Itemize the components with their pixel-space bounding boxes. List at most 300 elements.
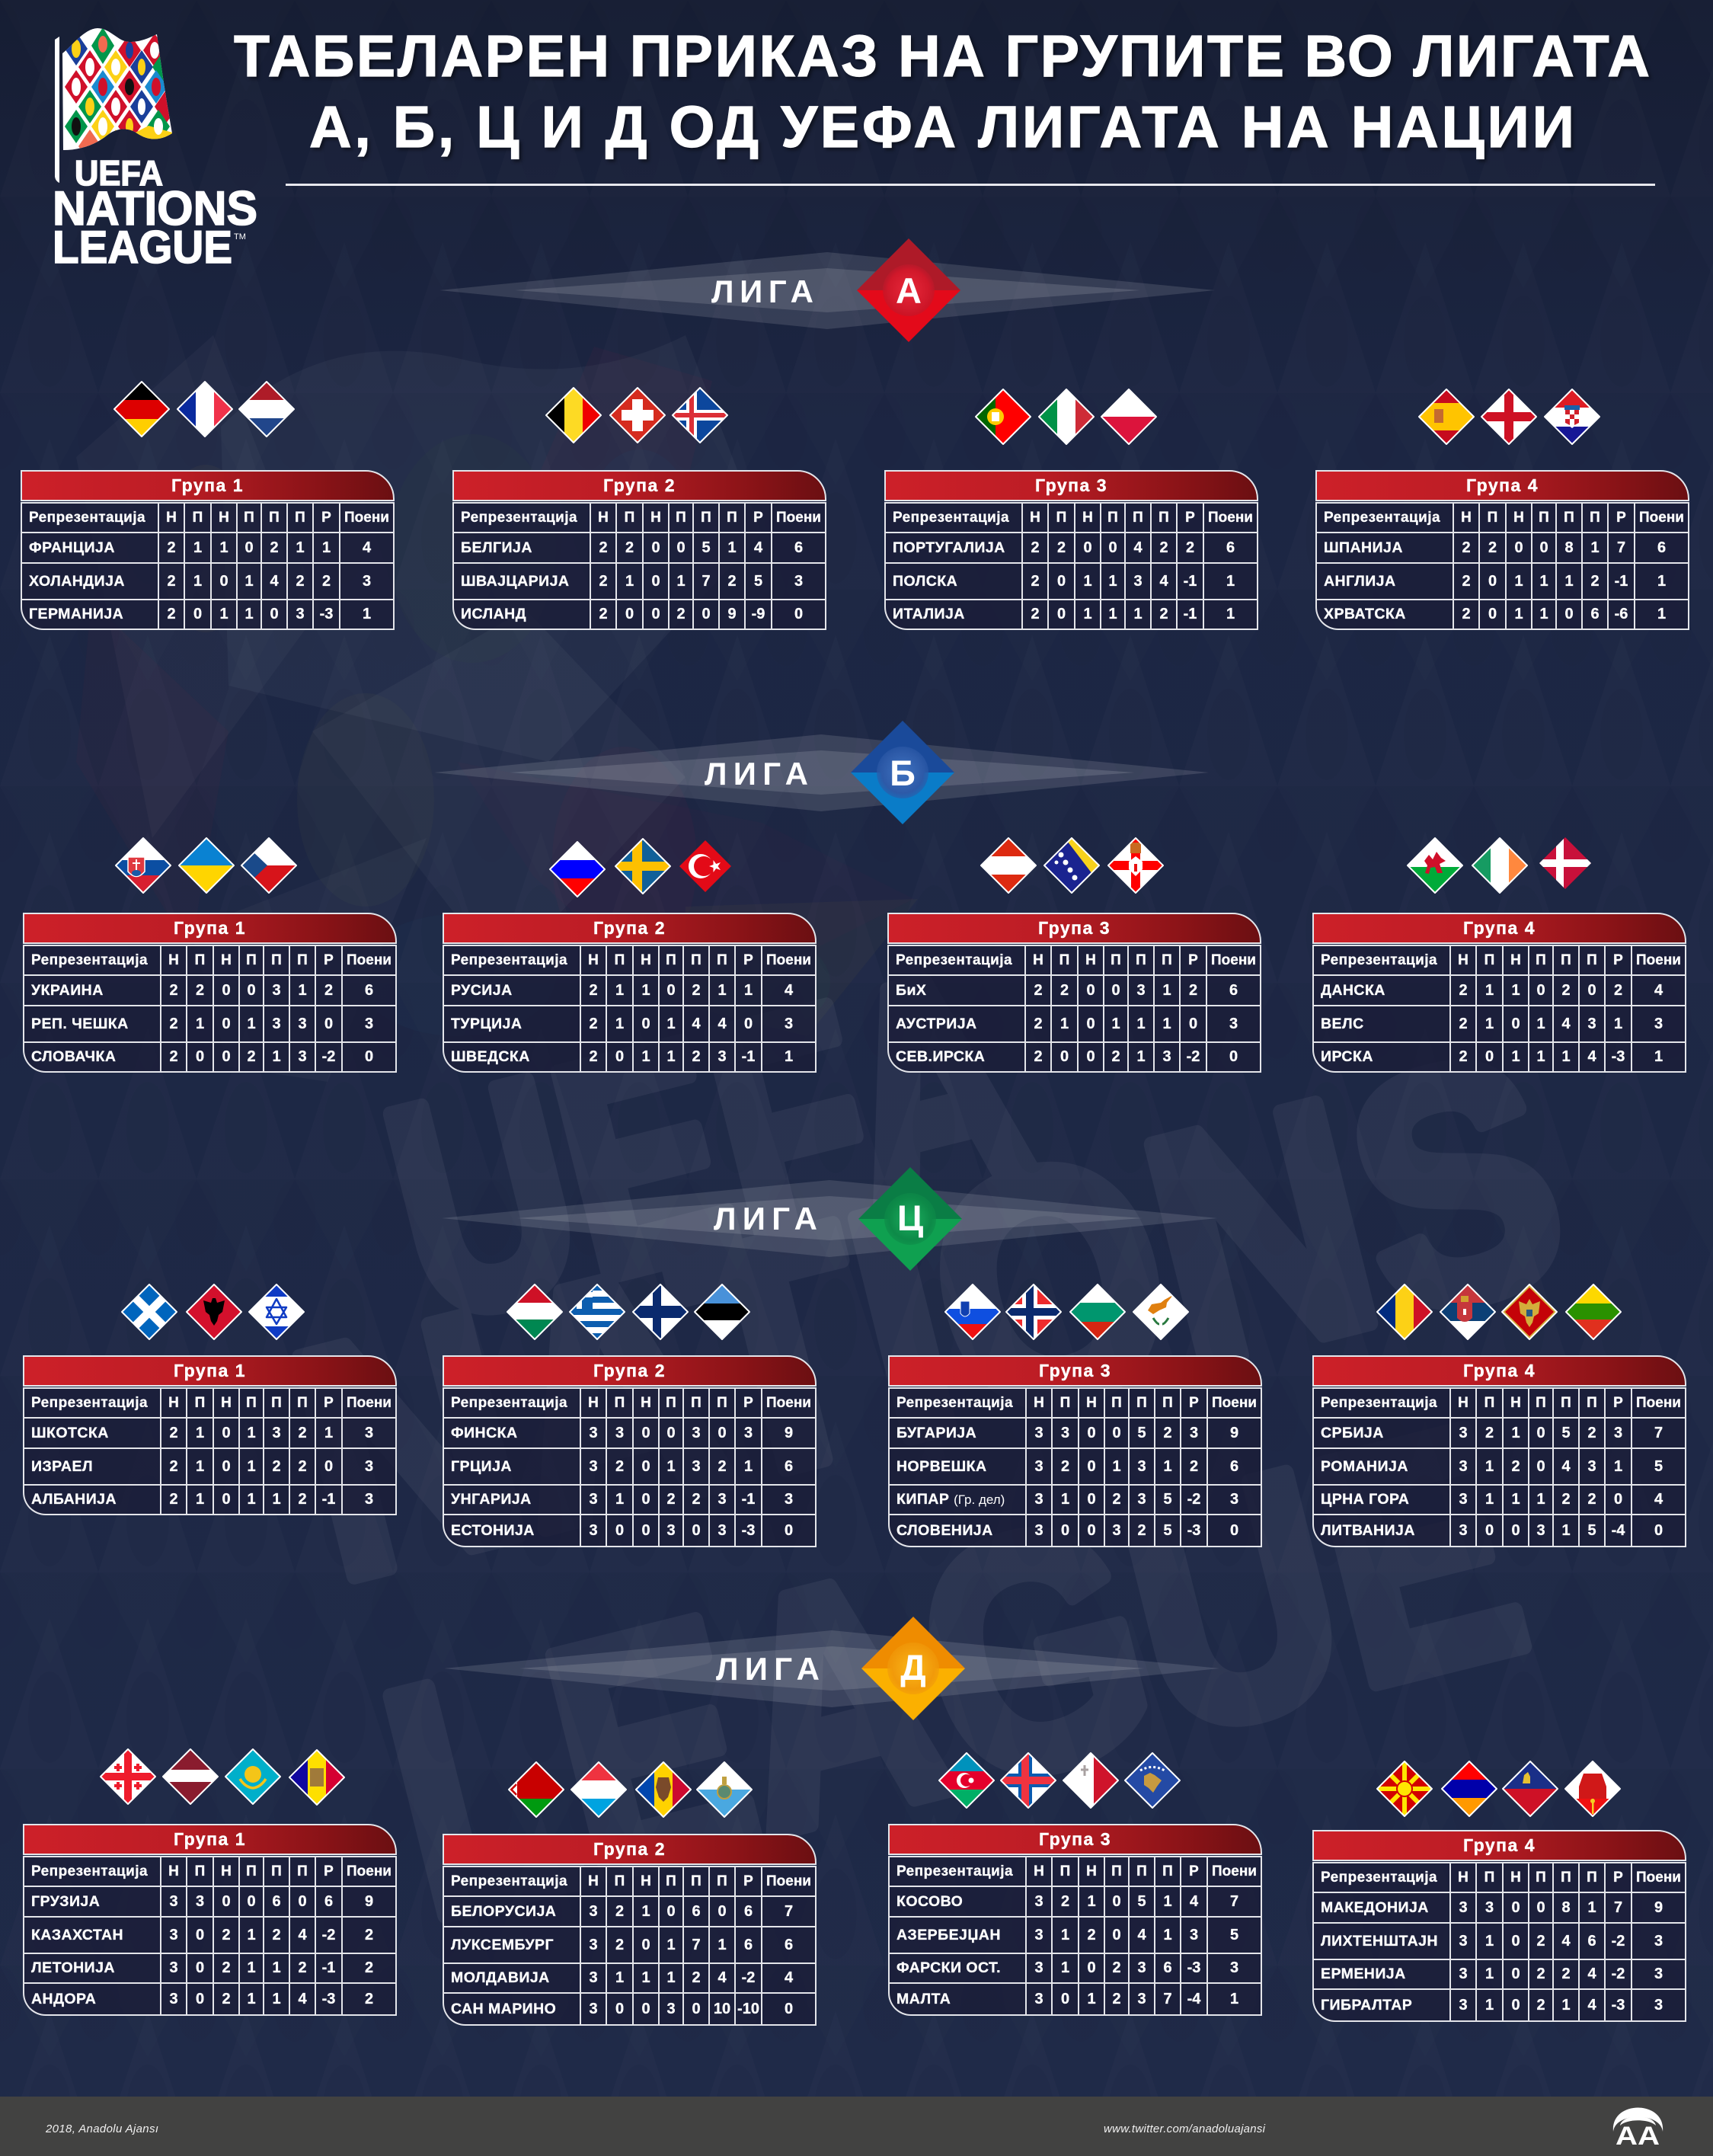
flags: league А — [111, 379, 1603, 447]
standings: 3 — [666, 1522, 676, 1539]
table: league А group 4 — [1315, 470, 1689, 630]
standings: 1 — [1561, 1522, 1571, 1539]
standings: 1 — [1060, 1015, 1069, 1032]
standings: 0 — [1087, 1522, 1096, 1539]
standings: 0 — [196, 1048, 204, 1065]
standings: 2 — [1137, 1522, 1146, 1539]
standings: Репрезентација — [31, 952, 148, 968]
standings: 3 — [1536, 1522, 1545, 1539]
flag: Liechtenstein — [1500, 1758, 1561, 1819]
standings: 2 — [1462, 606, 1471, 622]
standings: 1 — [193, 539, 202, 556]
standings: 3 — [692, 1425, 701, 1441]
standings: Н — [221, 1394, 232, 1411]
flag: Luxembourg — [568, 1759, 629, 1820]
standings: 3 — [1614, 1425, 1622, 1441]
standings: 0 — [1112, 1926, 1121, 1943]
title — [234, 24, 1650, 160]
standings: 0 — [1111, 981, 1120, 998]
standings: -1 — [742, 1491, 755, 1508]
standings: П — [701, 509, 711, 526]
league banner: А: ЛИГА — [711, 273, 813, 309]
league banner: Ц — [442, 1167, 1217, 1271]
standings: Р — [324, 952, 334, 968]
standings: 1 — [717, 981, 727, 998]
standings: П — [1536, 952, 1546, 968]
standings: 3 — [1137, 1990, 1146, 2007]
standings: РУСИЈА — [451, 981, 513, 998]
standings: -3 — [1612, 1048, 1625, 1065]
standings: 5 — [754, 573, 762, 590]
standings: 2 — [222, 1959, 231, 1976]
standings: -4 — [1612, 1522, 1625, 1539]
standings: АЗЕРБЕЈЏАН — [896, 1926, 1001, 1943]
standings: 2 — [272, 1458, 281, 1475]
standings: 4 — [692, 1015, 701, 1032]
logo text — [53, 153, 257, 273]
standings: 0 — [1488, 573, 1497, 590]
standings: П — [1484, 1394, 1494, 1411]
standings: 0 — [365, 1048, 373, 1065]
standings: 1 — [615, 1491, 624, 1508]
standings: П — [1056, 509, 1066, 526]
standings: 2 — [1159, 606, 1168, 622]
standings: 4 — [1587, 1966, 1596, 1982]
flag: Croatia — [1544, 389, 1600, 445]
standings: 1 — [244, 606, 254, 622]
standings: ФРАНЦИЈА — [29, 539, 115, 556]
standings: 1 — [1133, 606, 1143, 622]
standings: 6 — [1229, 981, 1238, 998]
standings: 3 — [1137, 1491, 1146, 1508]
standings: П — [297, 952, 308, 968]
standings: Н — [1086, 1394, 1097, 1411]
standings: 3 — [1061, 1425, 1069, 1441]
standings: МАКЕДОНИЈА — [1321, 1898, 1429, 1915]
standings: 1 — [744, 981, 753, 998]
standings: 0 — [324, 1458, 333, 1475]
standings: 1 — [666, 1015, 676, 1032]
standings: 0 — [641, 1425, 650, 1441]
logo trademark: TM — [234, 232, 246, 242]
standings: 3 — [794, 573, 803, 590]
standings: 1 — [1061, 1926, 1069, 1943]
standings: -3 — [320, 606, 333, 622]
standings: 0 — [651, 573, 660, 590]
standings: АНДОРА — [31, 1990, 96, 2007]
standings: 2 — [1031, 573, 1040, 590]
standings: П — [195, 1863, 205, 1879]
standings: 4 — [1587, 1996, 1596, 2013]
standings: ТУРЦИЈА — [451, 1015, 522, 1032]
standings: 3 — [1459, 1425, 1468, 1441]
standings: 2 — [169, 1015, 178, 1032]
flag: Moldova — [633, 1759, 694, 1820]
standings: 2 — [167, 573, 176, 590]
standings: 1 — [666, 1937, 676, 1953]
standings: 2 — [1111, 1048, 1120, 1065]
flag: Romania — [1374, 1281, 1435, 1342]
standings: 2 — [196, 981, 204, 998]
standings: П — [1136, 1394, 1147, 1411]
standings: -2 — [1187, 1048, 1200, 1065]
standings: 1 — [1485, 1996, 1494, 2013]
standings: 2 — [298, 1458, 307, 1475]
standings: 3 — [1459, 1966, 1468, 1982]
standings: 5 — [1561, 1425, 1571, 1441]
standings — [23, 1387, 397, 1515]
standings: Поени — [766, 1394, 811, 1411]
standings: Р — [321, 509, 331, 526]
standings: 1 — [1536, 1048, 1545, 1065]
standings: Поени — [1636, 952, 1681, 968]
standings: 3 — [1587, 1015, 1596, 1032]
table heading: Група 4 — [1463, 918, 1536, 938]
standings: 6 — [785, 1937, 793, 1953]
table heading — [1312, 1830, 1686, 1861]
standings: Поени — [1636, 1870, 1681, 1885]
standings: 1 — [193, 573, 202, 590]
standings: П — [297, 1394, 308, 1411]
table heading: Група 1 — [174, 1361, 246, 1380]
table: league А group 2 — [452, 470, 826, 630]
standings: РЕП. ЧЕШКА — [31, 1015, 129, 1032]
standings: П — [1484, 952, 1494, 968]
standings: 3 — [169, 1926, 178, 1943]
table: league Ц group 4 — [1312, 1355, 1686, 1549]
standings: 2 — [167, 606, 176, 622]
standings: 3 — [1133, 573, 1143, 590]
table heading — [888, 1355, 1262, 1387]
league banner: Б: ЛИГА — [705, 756, 808, 792]
flag: Austria — [980, 837, 1037, 894]
standings: ГРУЗИЈА — [31, 1892, 100, 1909]
standings: 0 — [1587, 981, 1596, 998]
standings: 2 — [1462, 539, 1471, 556]
standings: 2 — [365, 1959, 373, 1976]
standings: 0 — [785, 2001, 793, 2017]
standings: 1 — [1485, 1932, 1494, 1949]
standings: 0 — [1086, 1048, 1095, 1065]
standings: 1 — [324, 1425, 333, 1441]
standings: П — [244, 509, 254, 526]
standings: 1 — [1087, 1892, 1096, 1909]
table heading — [1312, 913, 1686, 944]
standings: 3 — [296, 606, 305, 622]
standings: 7 — [1654, 1425, 1663, 1441]
standings — [1312, 1862, 1686, 2022]
standings: 2 — [169, 1458, 178, 1475]
icon: AA logo: AA — [1616, 2122, 1660, 2151]
standings: 2 — [1163, 1425, 1172, 1441]
standings: 3 — [365, 1491, 373, 1508]
standings: Репрезентација — [29, 509, 145, 526]
standings: 2 — [692, 981, 701, 998]
standings: Р — [324, 1863, 334, 1879]
standings: ШКОТСКА — [31, 1425, 109, 1441]
standings: Поени — [347, 1863, 391, 1879]
standings: 0 — [222, 981, 231, 998]
standings: П — [1162, 1863, 1173, 1879]
table heading — [21, 470, 395, 501]
flag: Hungary — [507, 1284, 563, 1340]
standings: КОСОВО — [896, 1892, 963, 1909]
standings: 1 — [717, 1937, 727, 1953]
background watermark: giant UEFA Nations League wordmark: UEFA — [360, 901, 1056, 1384]
standings: П — [1488, 509, 1497, 526]
standings: 0 — [1230, 1522, 1238, 1539]
standings: 3 — [298, 1015, 307, 1032]
standings: 4 — [1159, 573, 1168, 590]
table heading — [23, 1355, 397, 1387]
standings: 0 — [641, 1015, 650, 1032]
standings: Р — [1613, 1394, 1623, 1411]
standings: 6 — [272, 1892, 281, 1909]
standings: 6 — [365, 981, 373, 998]
standings: ПОРТУГАЛИЈА — [893, 539, 1005, 556]
flag: Kosovo — [1122, 1750, 1183, 1811]
standings: 0 — [651, 606, 660, 622]
standings: 3 — [1034, 1458, 1043, 1475]
standings: 0 — [1654, 1522, 1663, 1539]
standings: Поени — [766, 952, 811, 968]
standings: 0 — [247, 981, 256, 998]
standings: 2 — [1459, 1015, 1468, 1032]
standings: 7 — [1617, 539, 1625, 556]
standings: 3 — [785, 1015, 793, 1032]
standings: ЛИХТЕНШТАЈН — [1321, 1932, 1438, 1949]
standings: 9 — [365, 1892, 373, 1909]
standings: 3 — [1230, 1959, 1238, 1976]
table heading: Група 2 — [603, 475, 676, 495]
standings: 0 — [615, 1522, 624, 1539]
standings: 4 — [1190, 1892, 1198, 1909]
standings: 3 — [272, 981, 281, 998]
standings: -3 — [322, 1990, 335, 2007]
standings: 1 — [196, 1491, 204, 1508]
standings: 5 — [1230, 1926, 1238, 1943]
standings: 4 — [298, 1926, 307, 1943]
standings: -1 — [1184, 606, 1197, 622]
standings: 2 — [169, 981, 178, 998]
standings: 3 — [1034, 1959, 1043, 1976]
standings: 0 — [222, 1425, 231, 1441]
standings: 2 — [169, 1048, 178, 1065]
standings: БУГАРИЈА — [896, 1425, 976, 1441]
standings: 3 — [365, 1458, 373, 1475]
standings: 0 — [1060, 1048, 1069, 1065]
standings: П — [727, 509, 737, 526]
standings: 9 — [785, 1425, 793, 1441]
league badge: Ц — [858, 1167, 962, 1271]
standings: СЛОВЕНИЈА — [896, 1522, 993, 1539]
standings: Репрезентација — [896, 1863, 1013, 1879]
standings: 1 — [615, 1015, 624, 1032]
standings: 4 — [785, 981, 793, 998]
standings: Н — [1458, 952, 1469, 968]
standings: КИПАР (Гр. дел) — [896, 1491, 1005, 1508]
standings: П — [1107, 509, 1118, 526]
standings: Поени — [1212, 1394, 1257, 1411]
standings: 2 — [1587, 1425, 1596, 1441]
standings: 0 — [1189, 1015, 1197, 1032]
standings: 3 — [1485, 1898, 1494, 1915]
standings: 3 — [1190, 1926, 1198, 1943]
standings: П — [1561, 1870, 1571, 1885]
standings — [888, 1856, 1262, 2016]
standings: 4 — [1137, 1926, 1146, 1943]
standings: ШПАНИЈА — [1324, 539, 1403, 556]
standings: 3 — [589, 1969, 598, 1986]
standings — [23, 1856, 397, 2016]
standings: Н — [168, 1863, 179, 1879]
standings: ГЕРМАНИЈА — [29, 606, 123, 622]
standings: СЕВ.ИРСКА — [896, 1048, 985, 1065]
standings: 3 — [1459, 1898, 1468, 1915]
table heading — [1312, 1355, 1686, 1387]
standings: 1 — [1162, 981, 1171, 998]
standings: П — [666, 1873, 676, 1889]
standings: ХРВАТСКА — [1324, 606, 1406, 622]
standings: 0 — [717, 1903, 727, 1920]
standings: 1 — [196, 1425, 204, 1441]
table: league Б group 1 — [23, 913, 397, 1073]
standings: 1 — [322, 539, 331, 556]
flag: Portugal — [975, 389, 1031, 445]
standings: 4 — [785, 1969, 793, 1986]
standings: 1 — [247, 1015, 256, 1032]
standings: 0 — [1087, 1458, 1096, 1475]
standings: 1 — [1514, 573, 1523, 590]
standings: 0 — [1108, 539, 1117, 556]
standings — [887, 945, 1261, 1073]
standings: 1 — [1485, 1966, 1494, 1982]
league badge: Д — [861, 1617, 965, 1720]
standings: Репрезентација — [896, 1394, 1013, 1411]
standings: -1 — [322, 1959, 335, 1976]
standings: 1 — [641, 1969, 650, 1986]
standings: П — [246, 952, 257, 968]
standings: Поени — [347, 952, 391, 968]
table: league Ц group 3 — [888, 1355, 1262, 1549]
standings: 4 — [1133, 539, 1143, 556]
standings: 4 — [1654, 981, 1663, 998]
standings: 2 — [1034, 981, 1043, 998]
standings — [443, 1866, 817, 2026]
standings: 2 — [169, 1491, 178, 1508]
standings: П — [195, 1394, 205, 1411]
standings: 3 — [1034, 1522, 1043, 1539]
standings: 3 — [169, 1892, 178, 1909]
standings: 0 — [615, 2001, 624, 2017]
table heading: Група 4 — [1463, 1361, 1536, 1380]
flag: Spain — [1418, 389, 1475, 445]
standings: -2 — [1612, 1966, 1625, 1982]
league banner: Д: ЛИГА — [716, 1651, 820, 1687]
standings: 1 — [1614, 1458, 1622, 1475]
standings: 4 — [270, 573, 279, 590]
standings: 1 — [1163, 1892, 1172, 1909]
table: league Д group 1 — [23, 1824, 397, 2017]
standings: 0 — [666, 1903, 676, 1920]
standings: 0 — [641, 1522, 650, 1539]
standings: П — [1590, 509, 1600, 526]
standings: 1 — [1511, 1048, 1520, 1065]
flag: Montenegro — [1499, 1281, 1560, 1342]
standings: П — [1536, 1870, 1546, 1885]
flag: Serbia — [1437, 1281, 1498, 1342]
standings: 1 — [641, 1903, 650, 1920]
standings: П — [1587, 1394, 1597, 1411]
standings: Н — [598, 509, 609, 526]
standings: 4 — [298, 1990, 307, 2007]
standings: 1 — [1162, 1015, 1171, 1032]
background watermark: logo flag shapes — [76, 335, 918, 1082]
standings: 0 — [222, 1048, 231, 1065]
standings: 5 — [1587, 1522, 1596, 1539]
standings: ЕСТОНИЈА — [451, 1522, 535, 1539]
standings: 1 — [1083, 573, 1092, 590]
standings: Репрезентација — [451, 1394, 567, 1411]
standings: 3 — [1136, 981, 1146, 998]
standings: Р — [743, 952, 753, 968]
standings: 0 — [1614, 1491, 1622, 1508]
standings: П — [295, 509, 305, 526]
flag: Greece — [567, 1281, 628, 1342]
standings: 1 — [1511, 1425, 1520, 1441]
standings: 0 — [641, 1458, 650, 1475]
standings: П — [691, 952, 701, 968]
standings: 7 — [701, 573, 711, 590]
table: league Ц group 1 — [23, 1355, 397, 1515]
standings: -3 — [1187, 1522, 1200, 1539]
standings: 3 — [589, 2001, 598, 2017]
standings: ВЕЛС — [1321, 1015, 1364, 1032]
standings: П — [676, 509, 686, 526]
standings: 7 — [1163, 1990, 1172, 2007]
standings: 1 — [666, 1048, 676, 1065]
standings: 4 — [717, 1969, 727, 1986]
standings: 1 — [1163, 1926, 1172, 1943]
flag: Norway — [1003, 1281, 1064, 1342]
flag: Poland — [1101, 389, 1157, 445]
standings: Поени — [1212, 1863, 1257, 1879]
standings: 3 — [785, 1491, 793, 1508]
standings: БЕЛОРУСИЈА — [451, 1903, 556, 1920]
standings: 3 — [1587, 1458, 1596, 1475]
standings: 2 — [247, 1048, 256, 1065]
table heading — [23, 913, 397, 944]
standings: 0 — [692, 1522, 701, 1539]
flag: Israel — [248, 1284, 305, 1340]
flag: England — [1481, 389, 1537, 445]
standings: ЕРМЕНИЈА — [1321, 1966, 1406, 1982]
standings: П — [269, 509, 280, 526]
standings: П — [1111, 1863, 1122, 1879]
standings: ЦРНА ГОРА — [1321, 1491, 1409, 1508]
standings: ГРЦИЈА — [451, 1458, 512, 1475]
standings: 3 — [1654, 1015, 1663, 1032]
standings: ИЗРАЕЛ — [31, 1458, 93, 1475]
standings: 0 — [692, 2001, 701, 2017]
standings: Н — [1461, 509, 1472, 526]
table: league Б group 2 — [443, 913, 817, 1073]
standings: СРБИЈА — [1321, 1425, 1384, 1441]
league badge: А — [857, 238, 960, 342]
standings: П — [691, 1873, 701, 1889]
standings: -2 — [742, 1969, 755, 1986]
league badge: А: А — [896, 270, 922, 311]
